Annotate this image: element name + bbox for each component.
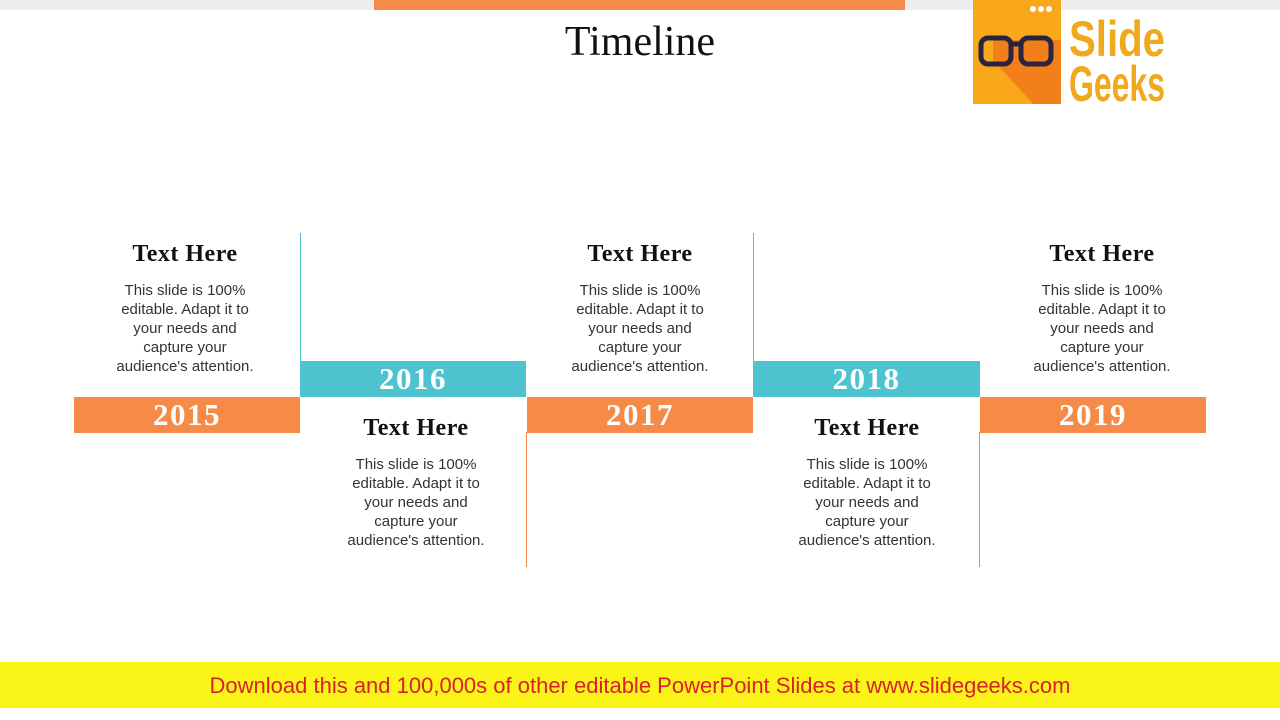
text block 2017 — [571, 241, 709, 375]
year 2017: 2017 — [606, 397, 674, 432]
year 2018 — [753, 361, 980, 397]
text block 2015: Text Here — [132, 241, 238, 267]
text block 2018: Text Here — [814, 415, 920, 441]
year 2019 — [980, 397, 1206, 433]
text block 2019 — [1033, 241, 1171, 375]
text block 2016: This slide is 100% — [356, 456, 476, 473]
year 2015: 2015 — [153, 397, 221, 432]
text block 2019: capture your — [1060, 339, 1144, 356]
text block 2017: audience's attention. — [571, 358, 709, 375]
text block 2018: your needs and — [815, 494, 919, 511]
text block 2017: capture your — [598, 339, 682, 356]
text block 2019: editable. Adapt it to — [1038, 301, 1166, 318]
text block 2015: This slide is 100% — [125, 282, 245, 299]
text block 2017: Text Here — [587, 241, 693, 267]
text block 2017: This slide is 100% — [580, 282, 700, 299]
text block 2015: audience's attention. — [116, 358, 254, 375]
text block 2015: your needs and — [133, 320, 237, 337]
text block 2019: your needs and — [1050, 320, 1154, 337]
text block 2019: This slide is 100% — [1042, 282, 1162, 299]
year 2017 — [527, 397, 753, 433]
text block 2017: your needs and — [588, 320, 692, 337]
text block 2019: Text Here — [1049, 241, 1155, 267]
text block 2016: Text Here — [363, 415, 469, 441]
text block 2016: audience's attention. — [347, 532, 485, 549]
text block 2015 — [116, 241, 254, 375]
year 2019: 2019 — [1059, 397, 1127, 432]
text block 2015: editable. Adapt it to — [121, 301, 249, 318]
footer banner — [0, 662, 1280, 708]
year 2018: 2018 — [832, 361, 900, 396]
text block 2018 — [798, 415, 936, 549]
title: Timeline — [565, 19, 715, 65]
text block 2015: capture your — [143, 339, 227, 356]
text block 2018: This slide is 100% — [807, 456, 927, 473]
logo — [973, 0, 1165, 104]
text block 2018: editable. Adapt it to — [803, 475, 931, 492]
top accent bar — [374, 0, 905, 10]
text block 2016: capture your — [374, 513, 458, 530]
text block 2016 — [347, 415, 485, 549]
year 2015 — [74, 397, 300, 433]
footer banner: Download this and 100,000s of other editable PowerPoint Slides at www.slidegeeks.com — [210, 673, 1070, 698]
text block 2018: audience's attention. — [798, 532, 936, 549]
text block 2019: audience's attention. — [1033, 358, 1171, 375]
text block 2017: editable. Adapt it to — [576, 301, 704, 318]
text block 2018: capture your — [825, 513, 909, 530]
text block 2016: your needs and — [364, 494, 468, 511]
text block 2016: editable. Adapt it to — [352, 475, 480, 492]
year 2016: 2016 — [379, 361, 447, 396]
year 2016 — [300, 361, 526, 397]
